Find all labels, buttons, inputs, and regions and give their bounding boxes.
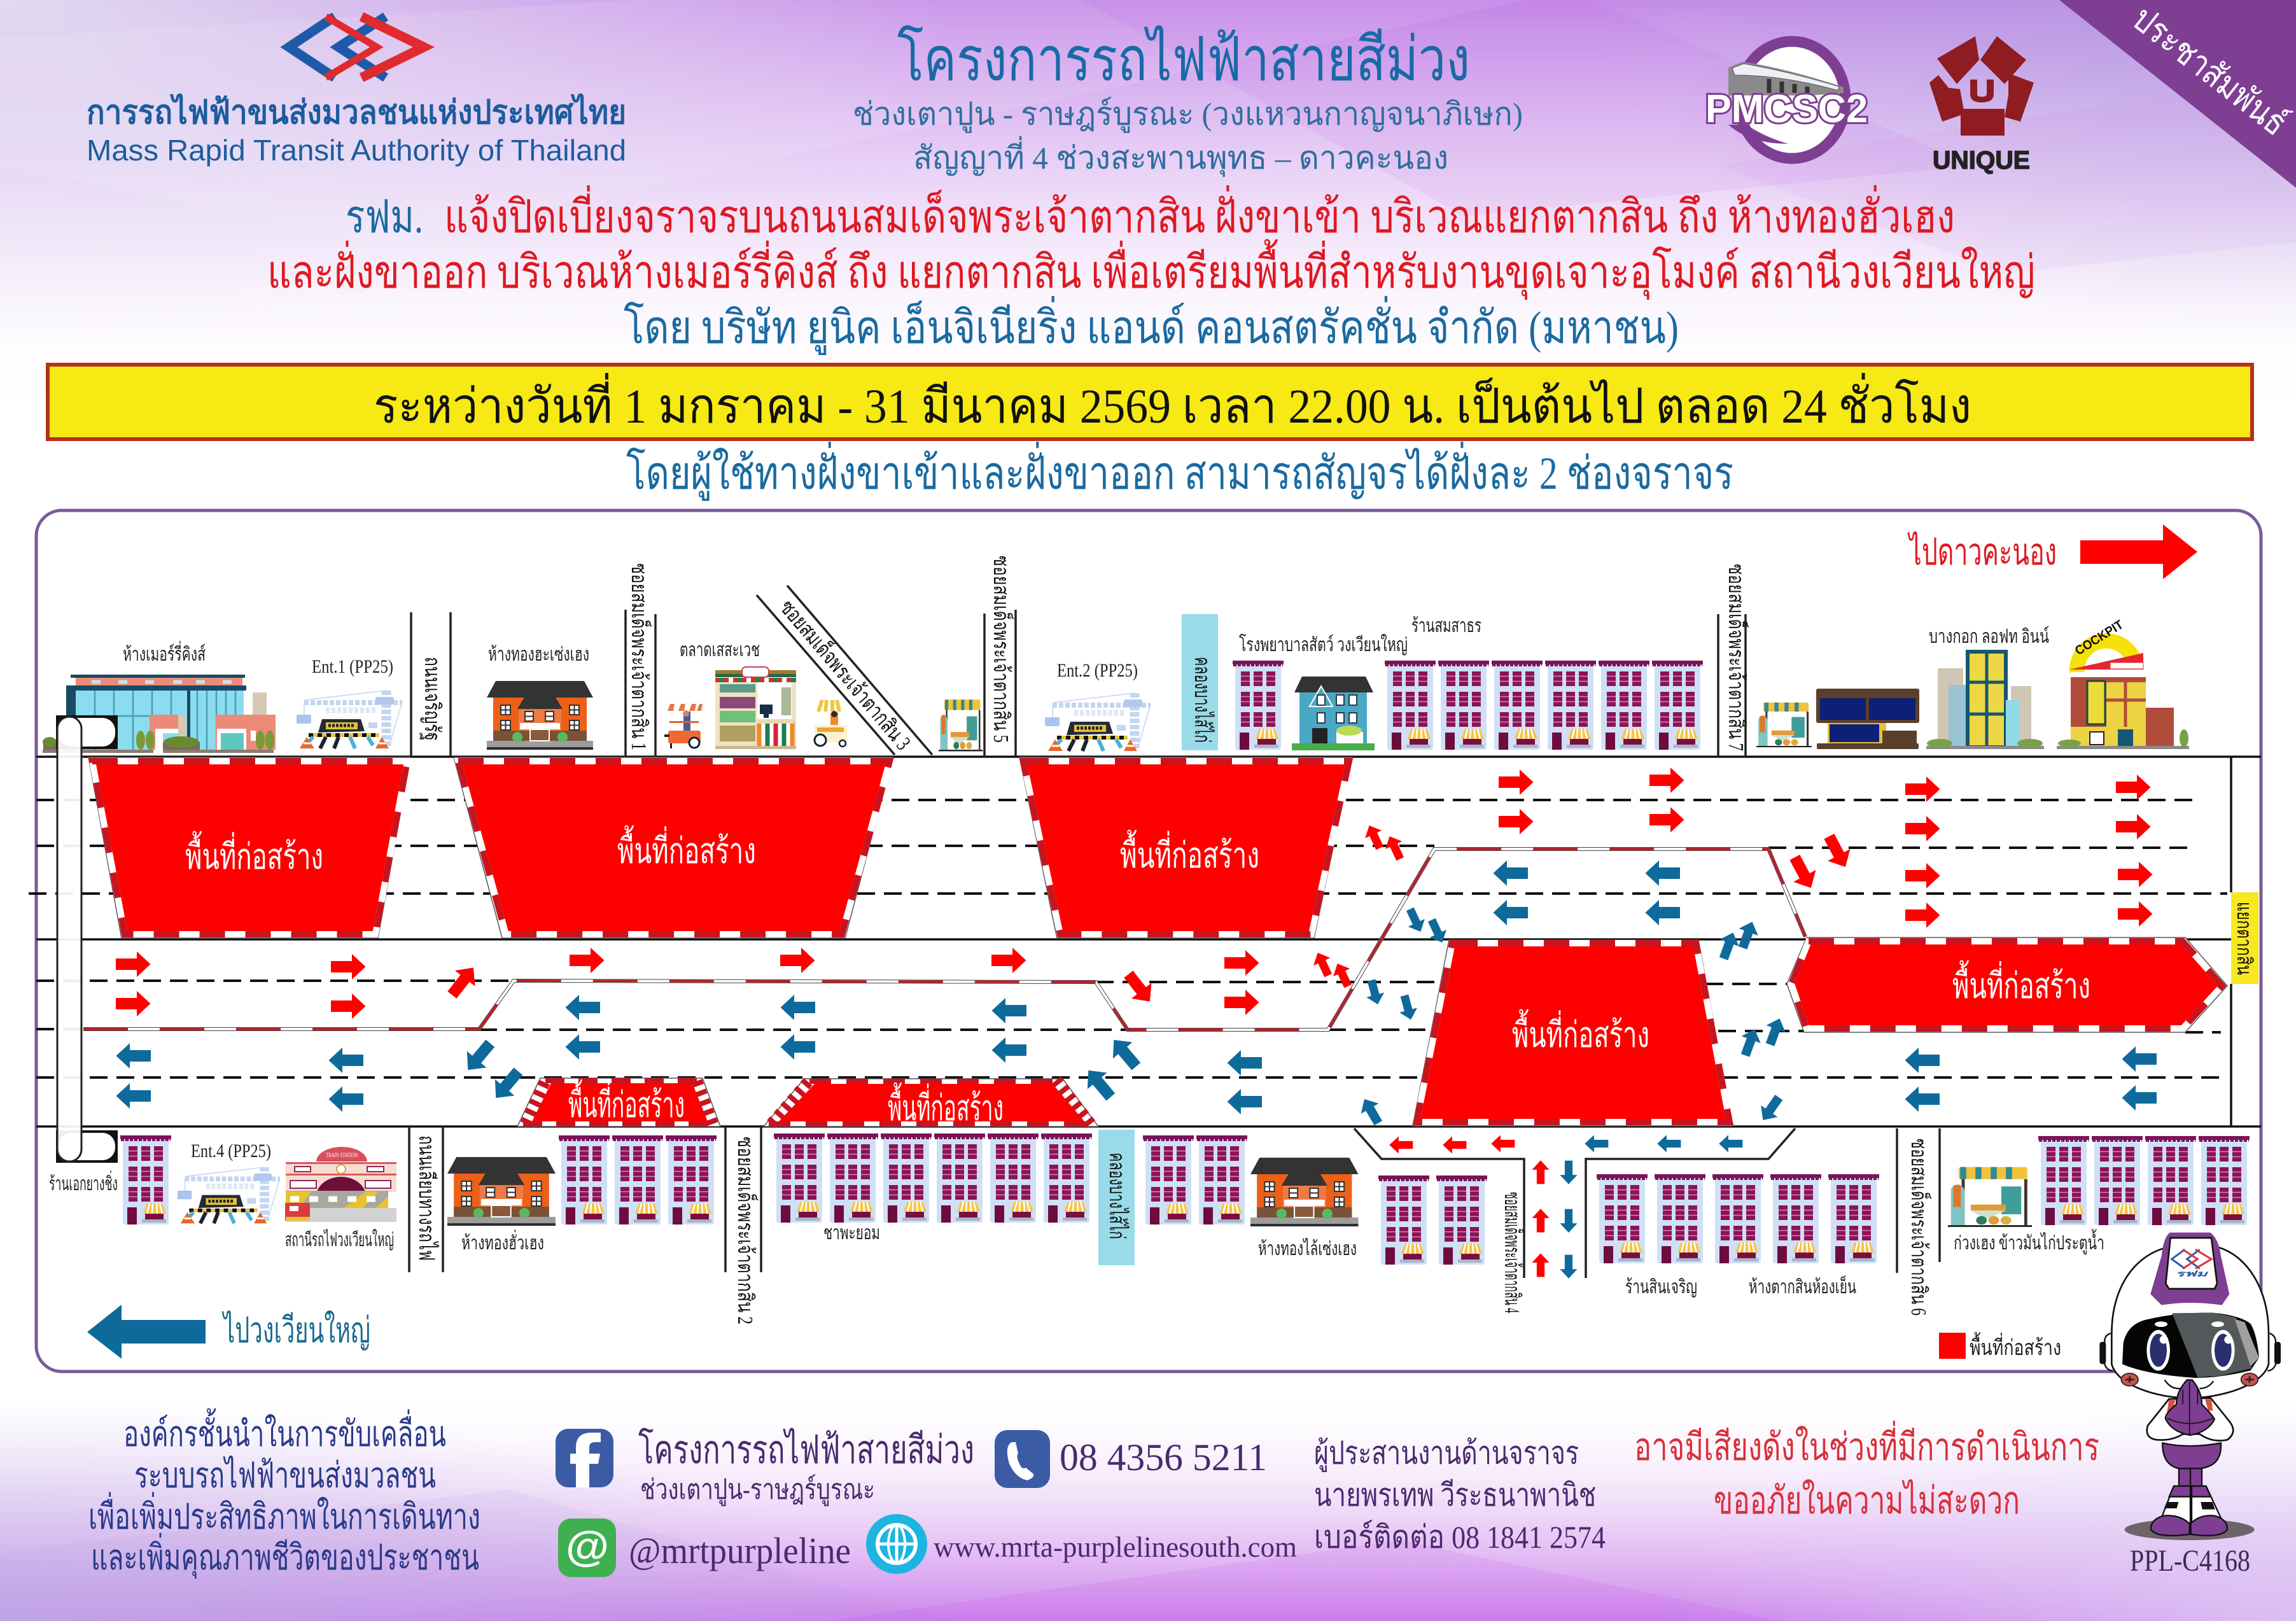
construction zone D: พื้นที่ก่อสร้าง xyxy=(1512,1009,1649,1055)
contact: LINE: @mrtpurpleline xyxy=(629,1530,851,1571)
construction zone F xyxy=(517,1078,720,1126)
entrance 1 site xyxy=(297,691,402,748)
contact: phone: 08 4356 5211 xyxy=(1060,1436,1267,1478)
building: corner shop xyxy=(120,1135,171,1225)
text: ซอยสมเด็จพระเจ้าตากสิน 4 xyxy=(1500,1192,1525,1313)
building: Cockpit shop xyxy=(2057,618,2189,749)
title block xyxy=(853,25,1523,177)
construction zone D xyxy=(1413,940,1733,1126)
announcement heading: แจ้งปิดเบี่ยงจราจรบนถนนสมเด็จพระเจ้าตากสิน ฝั่งขาเข้า บริเวณแยกตากสิน ถึง ห้างทองฮั่วเฮง xyxy=(444,185,1955,242)
construction zone B xyxy=(454,757,893,938)
date banner: ระหว่างวันที่ 1 มกราคม - 31 มีนาคม 2569 เวลา 22.00 น. เป็นต้นไป ตลอด 24 ชั่วโมง xyxy=(374,373,1971,433)
building: Merry Kings mall xyxy=(43,675,276,751)
contact: LINE xyxy=(558,1519,851,1577)
eyes xyxy=(2146,1321,2235,1371)
label: Tak Sin cold storage: ห้างตากสินห้องเย็น xyxy=(1749,1275,1856,1298)
icon: phone xyxy=(995,1430,1050,1488)
label: Soi 6: ซอยสมเด็จพระเจ้าตากสิน 6 xyxy=(1907,1139,1932,1316)
building: teal house xyxy=(1292,677,1375,750)
label: Ent.1: Ent.1 (PP25) xyxy=(312,656,393,677)
label: Cha Phayom: ชาพะยอม xyxy=(823,1223,880,1244)
coordinator heading: ผู้ประสานงานด้านจราจร xyxy=(1314,1435,1579,1472)
mascot: รฟม xyxy=(2175,1269,2209,1278)
subtitle section: ช่วงเตาปูน - ราษฎร์บูรณะ (วงแหวนกาญจนาภิเษก) xyxy=(853,96,1523,133)
smile xyxy=(2165,1380,2213,1389)
traffic arrows: blue xyxy=(116,860,2157,1279)
canal top: คลองบางไส้ไก่ xyxy=(1190,657,1215,743)
contact: Facebook xyxy=(556,1428,974,1506)
canal bottom: คลองบางไส้ไก่ xyxy=(1105,1153,1130,1239)
label: gold shop Huae Heng: ห้างทองฮั่วเฮง xyxy=(461,1230,544,1254)
mission line 3: เพื่อเพิ่มประสิทธิภาพในการเดินทาง xyxy=(88,1492,480,1537)
row of shophouses east xyxy=(2038,1136,2250,1225)
icon: food cart xyxy=(664,704,703,748)
building: train station xyxy=(285,1147,396,1222)
label: Soi 7: ซอยสมเด็จพระเจ้าตากสิน 7 xyxy=(1724,564,1749,751)
construction zone E xyxy=(1787,937,2227,1032)
label: Charoen Rat Road: ถนนเจริญรัฐ xyxy=(419,657,444,741)
arms xyxy=(2147,1398,2233,1441)
icon: stall xyxy=(939,699,983,751)
date banner xyxy=(48,365,2252,439)
building: gold shop Huae Heng xyxy=(447,1157,556,1226)
apology: ขออภัยในความไม่สะดวก xyxy=(1714,1478,2020,1522)
entrance 4 site xyxy=(178,1167,280,1223)
legend xyxy=(1939,1332,2061,1360)
announcement line 1: รฟม. xyxy=(346,192,423,242)
construction zone E: พื้นที่ก่อสร้าง xyxy=(1952,960,2090,1006)
row of shophouses top xyxy=(1385,661,1703,750)
traffic arrows: red xyxy=(116,768,2152,1277)
row of shophouses soi 4 west xyxy=(1378,1175,1487,1265)
construction zone F: พื้นที่ก่อสร้าง xyxy=(568,1079,685,1125)
label: Ek Yang Ching shop: ร้านเอกยางชิ่ง xyxy=(49,1170,118,1195)
legend: พื้นที่ก่อสร้าง xyxy=(1970,1332,2061,1360)
contractor line: โดย บริษัท ยูนิค เอ็นจิเนียริ่ง แอนด์ คอนสตรัคชั่น จำกัด (มหาชน) xyxy=(624,296,1679,355)
label: Kuang Heng chicken rice: ก่วงเฮง ข้าวมันไก่ประตูน้ำ xyxy=(1954,1229,2104,1254)
MRTA English name: Mass Rapid Transit Authority of Thailand xyxy=(87,134,626,167)
label: Soi 1: ซอยสมเด็จพระเจ้าตากสิน 1 xyxy=(627,563,652,750)
leg bands xyxy=(2164,1502,2215,1510)
median barrier xyxy=(83,849,1805,1030)
arrow: to Wongwian Yai: ไปวงเวียนใหญ่ xyxy=(221,1310,370,1351)
contact: website xyxy=(866,1514,1297,1574)
icon: stall 3 xyxy=(1948,1167,2032,1227)
mission line 4: และเพิ่มคุณภาพชีวิตของประชาชน xyxy=(91,1533,479,1579)
icon: yellow cart xyxy=(815,700,847,747)
arrow: to Dao Khanong xyxy=(1907,524,2197,579)
footer mission text xyxy=(88,1408,480,1579)
reference code: PPL-C4168 xyxy=(2130,1544,2250,1578)
label: animal hospital: โรงพยาบาลสัตว์ วงเวียนใหญ่ xyxy=(1239,633,1408,656)
MRTA Thai name: การรถไฟฟ้าขนส่งมวลชนแห่งประเทศไทย xyxy=(87,93,626,131)
row of shophouses bottom 3 xyxy=(1143,1135,1247,1225)
logo: UNIQUE xyxy=(1929,36,2034,174)
label: Liap Thang Rotfai Road: ถนนเลียบทางรถไฟ xyxy=(414,1135,439,1261)
label: Wongwian Yai station: สถานีรถไฟวงเวียนใหญ่ xyxy=(285,1228,394,1251)
icon: LINE xyxy=(558,1519,616,1577)
label: Sesawet market: ตลาดเสสะเวช xyxy=(680,640,760,661)
construction zone A xyxy=(88,757,410,938)
row of shophouses soi 4 east xyxy=(1597,1174,1879,1263)
logo: PMCSC2 xyxy=(1705,41,1868,158)
Tak Sin junction label xyxy=(2231,892,2258,984)
label: Ent.4: Ent.4 (PP25) xyxy=(191,1140,271,1161)
entrance 2 site xyxy=(1045,693,1151,751)
visor xyxy=(2122,1313,2259,1378)
row of shophouses bottom 1 xyxy=(559,1135,717,1225)
icon: MRTA mark xyxy=(289,17,424,78)
mission line 1: องค์กรชั้นนำในการขับเคลื่อน xyxy=(123,1408,446,1454)
building: hospital shop xyxy=(1233,661,1284,750)
building: market shop xyxy=(715,667,796,749)
helmet xyxy=(2111,1247,2269,1398)
logo: PMCSC2: PMCSC2 xyxy=(1705,87,1868,131)
label: gold shop Ha Seng Heng: ห้างทองฮะเซ่งเฮง xyxy=(488,644,589,665)
construction zone G xyxy=(764,1079,1098,1128)
legs and shoes xyxy=(2151,1466,2227,1536)
mission line 2: ระบบรถไฟฟ้าขนส่งมวลชน xyxy=(134,1455,436,1496)
announcement heading xyxy=(267,185,2035,355)
project title: โครงการรถไฟฟ้าสายสีม่วง xyxy=(897,25,1470,94)
MRTA logo and name xyxy=(87,17,626,167)
arrow: to Dao Khanong: ไปดาวคะนอง xyxy=(1907,531,2057,573)
construction zone B: พื้นที่ก่อสร้าง xyxy=(617,825,756,871)
icon: LINE: @ xyxy=(566,1522,609,1569)
label: Soi 3: ซอยสมเด็จพระเจ้าตากสิน 3 xyxy=(775,594,916,755)
panel: road map xyxy=(36,510,2261,1372)
label: Merry Kings: ห้างเมอร์รี่คิงส์ xyxy=(123,641,206,665)
Tak Sin junction label: แยกตากสิน xyxy=(2233,902,2256,975)
coordinator phone: เบอร์ติดต่อ 08 1841 2574 xyxy=(1314,1519,1606,1555)
noise notice: อาจมีเสียงดังในช่วงที่มีการดำเนินการ xyxy=(1634,1421,2099,1468)
construction zone C xyxy=(1019,757,1352,938)
icon: globe xyxy=(866,1514,927,1574)
noise apology xyxy=(1634,1421,2099,1522)
praying hands xyxy=(2166,1380,2215,1435)
row of shophouses bottom 2 xyxy=(774,1133,1092,1223)
icon: stall 2 xyxy=(1756,703,1812,747)
Facebook page name: โครงการรถไฟฟ้าสายสีม่วง xyxy=(638,1428,974,1472)
coordinator name: นายพรเทพ วีระธนาพานิช xyxy=(1314,1477,1596,1513)
subtitle contract: สัญญาที่ 4 ช่วงสะพานพุทธ – ดาวคะนอง xyxy=(913,136,1448,177)
bolts xyxy=(2121,1373,2258,1386)
building: Cockpit shop: COCKPIT xyxy=(2073,618,2126,658)
label: Bangkok Loft Inn: บางกอก ลอฟท อินน์ xyxy=(1929,626,2049,647)
Facebook page section: ช่วงเตาปูน-ราษฎร์บูรณะ xyxy=(640,1474,875,1506)
canal top xyxy=(1182,614,1218,750)
lanes note: โดยผู้ใช้ทางฝั่งขาเข้าและฝั่งขาออก สามารถสัญจรได้ฝั่งละ 2 ช่องจราจร xyxy=(626,442,1733,501)
body xyxy=(2162,1443,2221,1468)
label: Ent.2: Ent.2 (PP25) xyxy=(1057,660,1138,681)
building: tower xyxy=(1926,652,2044,749)
corner ribbon: public relations xyxy=(2059,0,2296,188)
arrow: to Wongwian Yai xyxy=(87,1305,370,1359)
building: dark glass shop xyxy=(1816,689,1919,749)
helmet badge xyxy=(2150,1233,2229,1305)
shadow xyxy=(2125,1519,2255,1540)
building: gold shop Lai Seng Heng xyxy=(1250,1158,1359,1226)
construction zone C: พื้นที่ก่อสร้าง xyxy=(1120,830,1259,876)
construction zone A: พื้นที่ก่อสร้าง xyxy=(185,831,323,877)
traffic coordinator xyxy=(1314,1435,1606,1555)
construction zone G: พื้นที่ก่อสร้าง xyxy=(888,1083,1004,1128)
label: gold shop Lai Seng Heng: ห้างทองไล้เซ่งเฮง xyxy=(1258,1237,1357,1260)
icon: Facebook xyxy=(556,1429,613,1487)
label: Soi 2: ซอยสมเด็จพระเจ้าตากสิน 2 xyxy=(733,1137,759,1324)
contact: phone xyxy=(995,1430,1267,1488)
logo: UNIQUE: UNIQUE xyxy=(1933,146,2030,174)
pedestrian bridge left xyxy=(56,715,118,1163)
label: Soi 5: ซอยสมเด็จพระเจ้าตากสิน 5 xyxy=(989,556,1014,743)
side streets xyxy=(409,586,1940,1278)
ear pieces xyxy=(2099,1333,2281,1371)
label: Somsathorn shop: ร้านสมสาธร xyxy=(1411,615,1481,636)
canal bottom xyxy=(1098,1130,1135,1265)
label: Sin Charoen: ร้านสินเจริญ xyxy=(1625,1277,1697,1298)
building: train station: TRAIN STATION xyxy=(326,1152,358,1158)
contact: website: www.mrta-purplelinesouth.com xyxy=(934,1531,1297,1563)
mascot xyxy=(2099,1233,2281,1540)
road lines xyxy=(29,757,2261,1126)
building: gold shop Ha Seng Heng xyxy=(487,681,593,750)
